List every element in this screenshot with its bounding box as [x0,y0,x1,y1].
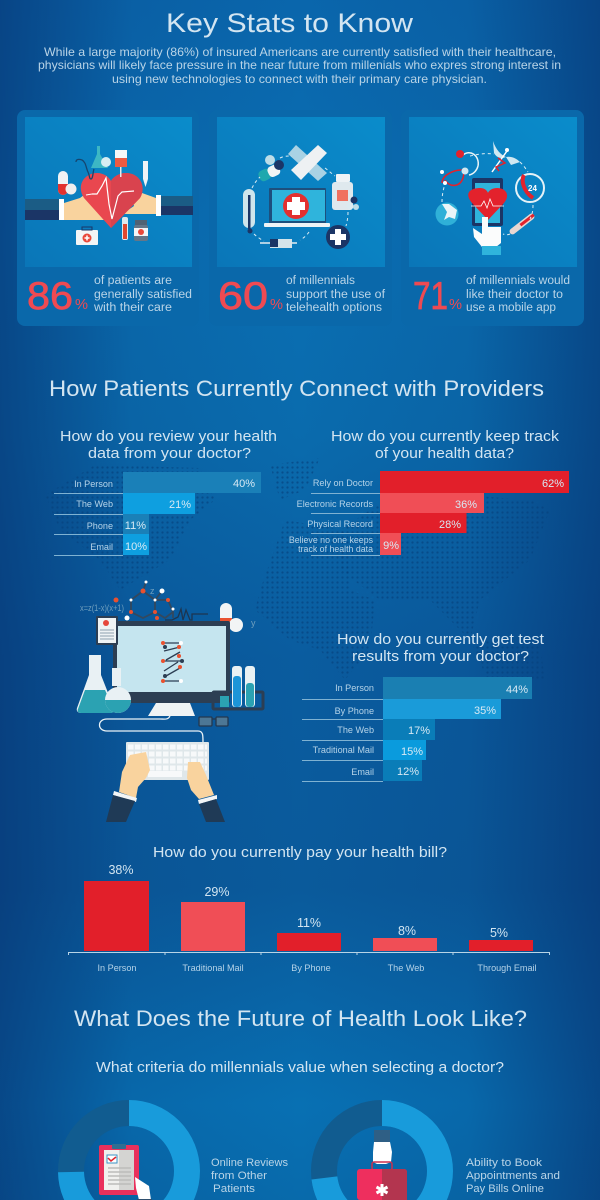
label: Ability to Book [466,1157,543,1169]
icon: clipboard and hand [99,1144,152,1200]
icon: globe [436,202,458,226]
icon: stethoscope [442,153,478,185]
icon: heart and hands [25,146,193,245]
icon: laptop with cross [264,188,330,227]
label: Pay Bills Online [466,1183,544,1195]
column values: 8% [398,924,416,938]
labels: Physical Record [307,519,373,529]
values: 62% [542,478,564,490]
formula labels: x=z(1-x)(x+1) [80,603,124,613]
test tubes and rack [213,666,263,709]
values: 21% [169,499,191,511]
stat text: of millennials [286,275,355,287]
values: 9% [383,540,399,552]
panel: 71% mobile app [401,110,584,326]
icon: blood bag [115,150,127,177]
icon: thermometer [243,189,255,234]
chart: review health data [54,429,277,556]
formula labels: z [150,586,155,596]
labels: Phone [87,521,113,531]
column values: 5% [490,926,508,940]
pill [220,603,243,632]
label: Appointments and [466,1170,560,1182]
values: 15% [401,746,423,758]
bars [123,472,261,555]
column labels: By Phone [291,963,331,973]
icon: bandage [288,145,327,181]
icon: stethoscope [76,159,94,179]
axis [68,952,550,955]
labels: By Phone [335,706,374,716]
values [125,478,255,553]
label [211,1157,289,1195]
stat text [466,275,570,314]
values: 17% [408,725,430,737]
stat: 60%: % [270,296,283,313]
values: 40% [233,478,255,490]
values: 10% [125,541,147,553]
chart heading: data from your doctor? [88,446,251,462]
icon: capsule [257,163,282,183]
labels: Traditional Mail [313,745,374,755]
stat text [286,275,386,314]
stat: 86%: % [75,296,88,313]
icon: medical cross badge [326,225,350,249]
panel: 86% satisfied [17,110,199,326]
icon: 24h phone: 24 [528,184,537,193]
labels [289,478,374,554]
stat: 60% [218,275,283,318]
stat text: like their doctor to [466,289,563,301]
icon: small pills [346,196,359,210]
column values: 38% [108,863,134,877]
clipboard [96,616,118,645]
values: 44% [506,684,528,696]
stat text [93,275,192,314]
column values: 11% [297,916,321,930]
label: from Other [211,1170,267,1182]
icon: medicine bottle [134,220,148,241]
formula labels [80,586,256,628]
DNA helix [161,641,184,683]
label: Patients [213,1183,256,1195]
chart heading: How do you currently get test [337,632,544,648]
label: Online Reviews [211,1157,289,1169]
labels: Electronic Records [297,499,373,509]
intro text: physicians will likely face pressure in the near future from millenials who expres strong interest in [38,58,561,72]
stat text: of patients are [94,275,172,287]
icon: medicine bottle [332,174,353,210]
illustration: computer and lab [77,580,263,822]
column values: 29% [204,885,230,899]
chart heading: How do you currently keep track [331,429,560,445]
formula labels: y [251,618,256,628]
stat text: telehealth options [286,302,382,314]
column values [108,863,508,940]
molecule network [114,580,174,620]
chart heading: How do you currently pay your health bill? [153,845,447,861]
labels: Rely on Doctor [313,478,373,488]
subheading: criteria: What criteria do millennials value when selecting a doctor? [96,1060,504,1076]
icon: pill [58,171,76,195]
intro text: using new technologies to connect with their primary care physician. [112,72,487,86]
column labels: In Person [98,963,136,973]
rules [54,494,123,556]
label [466,1157,560,1195]
labels: Email [351,767,374,777]
labels: track of health data [298,544,373,554]
icon: thermometer [143,161,148,187]
chart: pay health bill [68,845,550,973]
icon: hand with medical bag [357,1130,407,1200]
stat text: support the use of [286,289,386,301]
intro text [38,45,561,86]
column labels: Through Email [477,963,537,973]
labels: In Person [335,683,374,693]
stat text: generally satisfied [94,289,192,301]
stat text: with their care [93,302,172,314]
heartbeat line [165,609,208,620]
bars [380,471,569,555]
heading: future of health: What Does the Future of Health Look Like? [74,1006,527,1031]
icon: syringe [260,239,297,248]
glasses [199,717,228,726]
values: 35% [474,705,496,717]
donut ring [71,1113,187,1200]
cable [100,716,203,742]
column labels: The Web [388,963,424,973]
values: 12% [397,766,419,778]
values: 28% [439,519,461,531]
icon: thermometer [508,212,536,236]
chart heading [337,632,544,665]
column labels: Traditional Mail [182,963,244,973]
bars [383,677,532,781]
hands [106,752,225,822]
labels: The Web [76,499,113,509]
stat text: of millennials would [466,275,570,287]
labels [74,479,113,552]
chart heading: How do you review your health [60,429,277,445]
title: Key Stats to Know [166,8,414,38]
icon: lab flasks [91,146,111,168]
icon: phone with heart and hand [468,178,507,255]
chart heading [60,429,277,462]
icon: pills [265,155,284,170]
stat text: use a mobile app [466,302,556,314]
labels: The Web [337,725,374,735]
chart heading: results from your doctor? [352,649,529,665]
intro text: While a large majority (86%) of insured Americans are currently satisfied with their healthcare, [44,45,556,59]
icon: stethoscope nodes [440,150,468,185]
icon: caduceus [492,141,520,172]
donut: book appointments [324,1113,560,1200]
chart heading: of your health data? [375,446,514,462]
chart: test results [302,632,544,782]
donut: online reviews [71,1113,289,1200]
panel: 60% telehealth [209,110,392,326]
chart heading [331,429,560,462]
icon: first aid kit [76,227,98,245]
keyboard [126,742,209,780]
round flask [105,668,131,713]
donut ring [324,1113,440,1200]
monitor [113,621,230,716]
labels: In Person [74,479,113,489]
dashed ring [442,154,533,235]
values: 11% [125,520,146,532]
values [397,684,528,778]
values [383,478,564,552]
rules [302,700,383,782]
conical flask [77,655,114,713]
rules [311,494,380,556]
icon: test tube [122,217,128,240]
stat: 60%: 60 [218,275,268,318]
heading: how patients connect: How Patients Currently Connect with Providers [49,376,544,401]
dashed ring [252,156,348,241]
column labels [98,963,537,973]
chart: track health data [289,429,569,556]
columns [84,881,533,951]
values: 36% [455,499,477,511]
icon: 24h phone [516,174,544,202]
labels [313,683,374,777]
stat: 71%: 71 [413,275,448,318]
world map dot pattern [45,458,550,685]
stat: 71%: % [449,296,462,313]
labels: Believe no one keeps [289,535,374,545]
labels: Email [90,542,113,552]
stat: 86%: 86 [27,275,73,318]
